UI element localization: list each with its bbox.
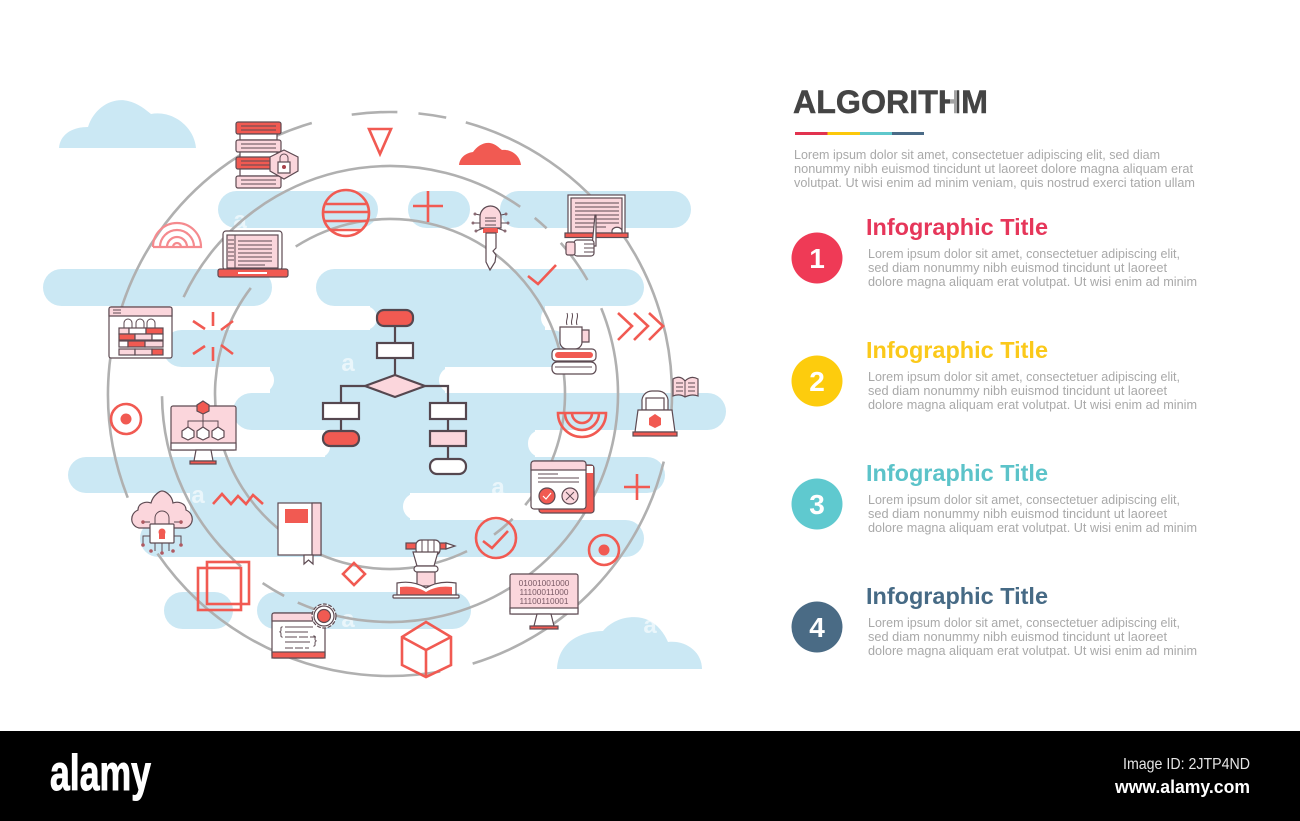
icon: code window with gear	[272, 604, 336, 658]
target right	[589, 535, 619, 565]
number badge 4	[792, 602, 842, 652]
item 2 text: sed diam nonummy nibh euismod tincidunt ut laoreet	[868, 384, 1168, 398]
number badge 1	[792, 232, 842, 284]
item 4 text: Lorem ipsum dolor sit amet, consectetuer adipiscing elit,	[868, 616, 1180, 630]
icon: monitor with hierarchy	[171, 401, 236, 464]
central flowchart	[323, 310, 466, 474]
icon: binary monitor: 11100110001	[520, 596, 569, 606]
number badge 4: 4	[809, 612, 825, 643]
small diamond	[343, 563, 365, 585]
item 4 text: dolore magna aliquam erat volutpat. Ut wisi enim ad minim	[868, 644, 1197, 658]
item 4 text: sed diam nonummy nibh euismod tincidunt ut laoreet	[868, 630, 1168, 644]
title: ALGORITHM	[793, 84, 988, 120]
item 3 text: sed diam nonummy nibh euismod tincidunt ut laoreet	[868, 507, 1168, 521]
item 1 text	[868, 247, 1197, 289]
plus right	[624, 474, 650, 500]
item 1 text: Lorem ipsum dolor sit amet, consectetuer adipiscing elit,	[868, 247, 1180, 261]
decorative red shapes	[111, 129, 663, 677]
item 3 text: dolore magna aliquam erat volutpat. Ut wisi enim ad minim	[868, 521, 1197, 535]
icon: digital key	[472, 206, 510, 270]
item 4 title: Infographic Title	[866, 583, 1048, 609]
rainbow arc bottom	[558, 413, 606, 437]
colour underline bar	[795, 132, 924, 135]
icon: approve or reject window	[531, 461, 594, 513]
faint watermark letters: a	[341, 350, 355, 377]
zigzag	[213, 494, 263, 504]
icon: binary monitor: 01001001000	[519, 578, 570, 588]
panel: item 4	[792, 583, 1197, 658]
item 1 text: sed diam nonummy nibh euismod tincidunt ut laoreet	[868, 261, 1168, 275]
chevrons	[618, 313, 663, 340]
site url: www.alamy.com	[1114, 777, 1250, 797]
icon: binary monitor	[510, 574, 578, 629]
blue bands	[0, 191, 841, 629]
icon: code window with gear: }	[313, 633, 317, 647]
icon: hand with pencil over open book	[393, 540, 459, 598]
panel: item 1	[792, 214, 1197, 289]
icon: closed book	[278, 503, 321, 564]
item 2 text: Lorem ipsum dolor sit amet, consectetuer adipiscing elit,	[868, 370, 1180, 384]
image id: Image ID: 2JTP4ND	[1123, 756, 1250, 773]
cloud: bottom right	[557, 617, 702, 669]
overlapping squares	[198, 562, 249, 610]
faint watermark letters: a	[491, 474, 505, 501]
number badge 3: 3	[809, 489, 825, 520]
faint watermark letters	[191, 207, 657, 639]
red cloud	[459, 143, 521, 165]
alamy logo: alamy	[50, 745, 151, 801]
intro text block: volutpat. Ut wisi enim ad minim veniam, quis nostrud exerci tation ullam	[794, 176, 1195, 190]
icon: coffee cup on books	[552, 313, 596, 374]
item 3 title: Infographic Title	[866, 460, 1048, 486]
rainbow arc top	[153, 223, 201, 247]
intro text block: Lorem ipsum dolor sit amet, consectetuer adipiscing elit, sed diam	[794, 148, 1160, 162]
sunburst	[193, 312, 233, 361]
number badge 3	[792, 478, 842, 530]
icon: binary monitor: 11100011000	[520, 587, 569, 597]
footer bar	[0, 731, 1300, 821]
item 1 text: dolore magna aliquam erat volutpat. Ut wisi enim ad minim	[868, 275, 1197, 289]
plus	[413, 191, 443, 222]
target left	[111, 404, 141, 434]
panel: item 2	[792, 337, 1197, 412]
icon: toaster	[633, 391, 677, 436]
concentric dashed rings	[69, 73, 711, 715]
check mark	[528, 265, 556, 284]
item 1 title: Infographic Title	[866, 214, 1048, 240]
item 2 title: Infographic Title	[866, 337, 1048, 363]
faint watermark letters: a	[233, 207, 247, 234]
icon: firewall window	[109, 307, 172, 358]
background clouds and blue bands	[0, 100, 841, 669]
cloud: top left	[59, 100, 196, 148]
icon: cloud with lock	[132, 491, 192, 555]
intro text block	[794, 148, 1195, 190]
icon: code window with gear: {	[279, 624, 283, 638]
number badge 2	[792, 356, 842, 406]
item 3 text	[868, 493, 1197, 535]
icon: laptop with code	[218, 231, 288, 277]
icon: chalkboard with pointer hand	[565, 195, 628, 256]
item 4 text	[868, 616, 1197, 658]
faint watermark letters: a	[191, 482, 205, 509]
number badge 1: 1	[809, 243, 825, 274]
faint watermark letters: a	[341, 606, 355, 633]
item 2 text: dolore magna aliquam erat volutpat. Ut wisi enim ad minim	[868, 398, 1197, 412]
triangle	[369, 129, 391, 154]
striped circle	[323, 190, 369, 236]
panel: item 3	[792, 460, 1197, 535]
icon: open book	[673, 377, 698, 397]
icon: server with lock	[236, 122, 298, 188]
item 3 text: Lorem ipsum dolor sit amet, consectetuer adipiscing elit,	[868, 493, 1180, 507]
faint watermark letters: a	[643, 612, 657, 639]
intro text block: nonummy nibh euismod tincidunt ut laoreet dolore magna aliquam erat	[794, 162, 1194, 176]
item 2 text	[868, 370, 1197, 412]
check circle	[476, 518, 516, 558]
number badge 2: 2	[809, 366, 825, 397]
cube	[402, 622, 451, 677]
